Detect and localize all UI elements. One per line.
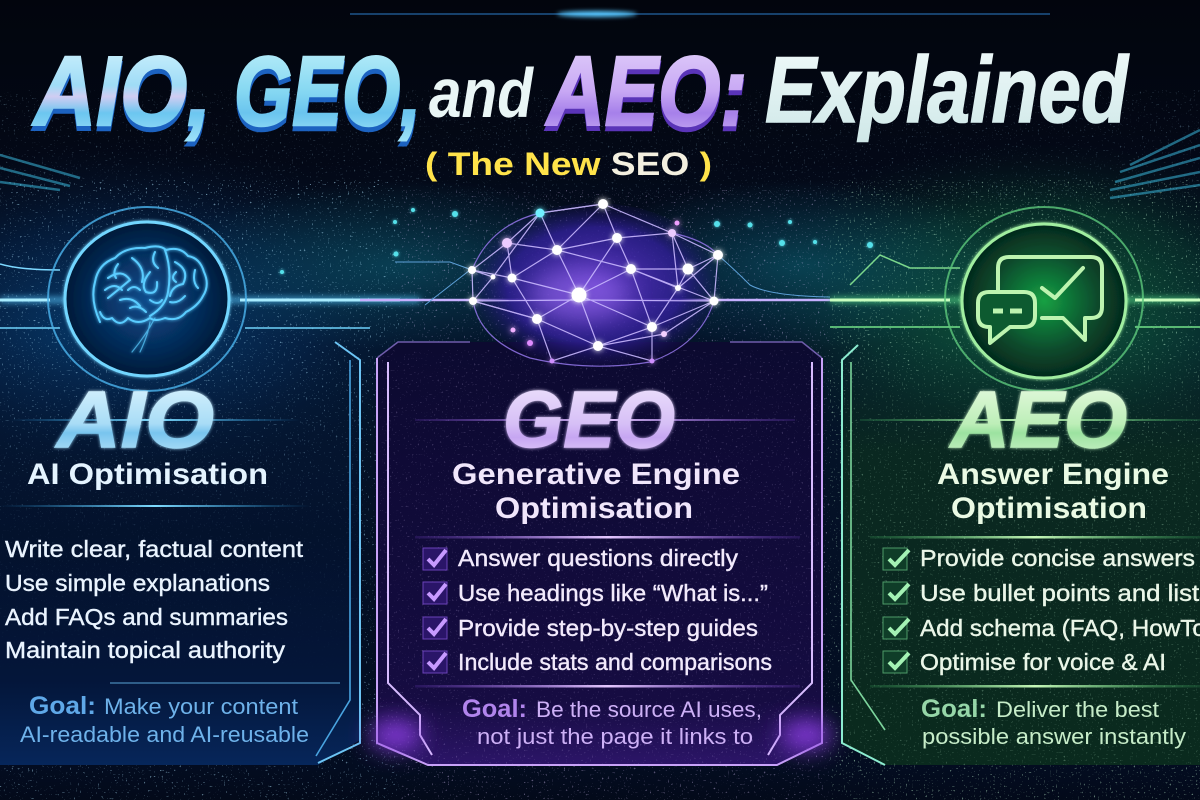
goal: AIO	[20, 692, 309, 747]
goal: AIO: Make your content	[104, 694, 298, 719]
goal: AEO: possible answer instantly	[922, 724, 1186, 749]
goal: AIO: AI-readable and AI-reusable	[20, 722, 309, 747]
title word: AEO: AEO:	[545, 41, 747, 151]
list: GEO actions: Answer questions directly	[458, 545, 739, 571]
goal: GEO: not just the page it links to	[477, 724, 753, 749]
frame: AEO	[842, 345, 1200, 765]
list: AEO actions: Add schema (FAQ, HowTo)	[920, 615, 1200, 641]
subheading: Generative Engine Optimisation: Optimisation	[495, 492, 693, 525]
list: GEO actions	[423, 545, 772, 675]
list: AIO actions: Use simple explanations	[5, 570, 270, 596]
goal: GEO	[462, 695, 762, 749]
list: AIO actions: Write clear, factual content	[5, 536, 304, 562]
title word: GEO: GEO,	[234, 36, 421, 146]
frame: GEO	[370, 342, 832, 765]
goal: AEO: Goal:	[921, 695, 987, 723]
list: AIO actions	[5, 536, 304, 663]
heading: GEO: GEO	[503, 375, 675, 464]
heading: AEO: AEO	[949, 375, 1127, 464]
subheading: AI Optimisation: AI Optimisation	[27, 458, 268, 491]
panel: AEO	[830, 207, 1200, 765]
title word: AEO: AEO:	[545, 36, 747, 146]
glow lines	[830, 255, 1200, 421]
list: AIO actions: Maintain topical authority	[5, 637, 286, 663]
panel: AIO	[0, 207, 420, 765]
title word: AIO: AIO,	[31, 36, 211, 146]
goal: AEO: Deliver the best	[996, 697, 1159, 722]
frame: AIO	[0, 342, 360, 765]
list: AIO actions: Add FAQs and summaries	[5, 604, 288, 630]
glow lines	[0, 264, 420, 507]
subheading: Generative Engine Optimisation	[452, 458, 740, 525]
icon: chat bubbles with check	[945, 207, 1143, 391]
goal: AIO: Goal:	[29, 692, 96, 720]
goal: GEO: Be the source AI uses,	[536, 697, 762, 722]
subtitle: ( The New SEO )	[425, 146, 712, 182]
list: AEO actions: Use bullet points and lists	[920, 580, 1200, 606]
list: AEO actions: Provide concise answers	[920, 545, 1195, 571]
panel: GEO	[360, 199, 840, 765]
list: AEO actions	[883, 545, 1200, 675]
subheading: Generative Engine Optimisation: Generative Engine	[452, 458, 740, 491]
goal: AEO	[921, 695, 1186, 749]
subheading: Answer Engine Optimisation	[937, 458, 1169, 525]
list: GEO actions: Use headings like “What is...”	[458, 580, 768, 606]
goal: GEO: Goal:	[462, 695, 527, 723]
title word: GEO: GEO,	[234, 41, 421, 151]
list: AEO actions: Optimise for voice & AI	[920, 649, 1166, 675]
title	[31, 36, 1130, 151]
icon: neural network brain	[360, 199, 840, 367]
subheading: Answer Engine Optimisation: Optimisation	[951, 492, 1147, 525]
title word: Explained: Explained	[765, 37, 1130, 142]
icon: brain in circle	[48, 207, 246, 391]
title word: and: and	[429, 54, 534, 132]
heading: AIO: AIO	[55, 375, 214, 464]
list: GEO actions: Provide step-by-step guides	[458, 615, 758, 641]
title word: AIO: AIO,	[31, 41, 211, 151]
subheading: Answer Engine Optimisation: Answer Engine	[937, 458, 1169, 491]
list: GEO actions: Include stats and comparisons	[458, 649, 772, 675]
